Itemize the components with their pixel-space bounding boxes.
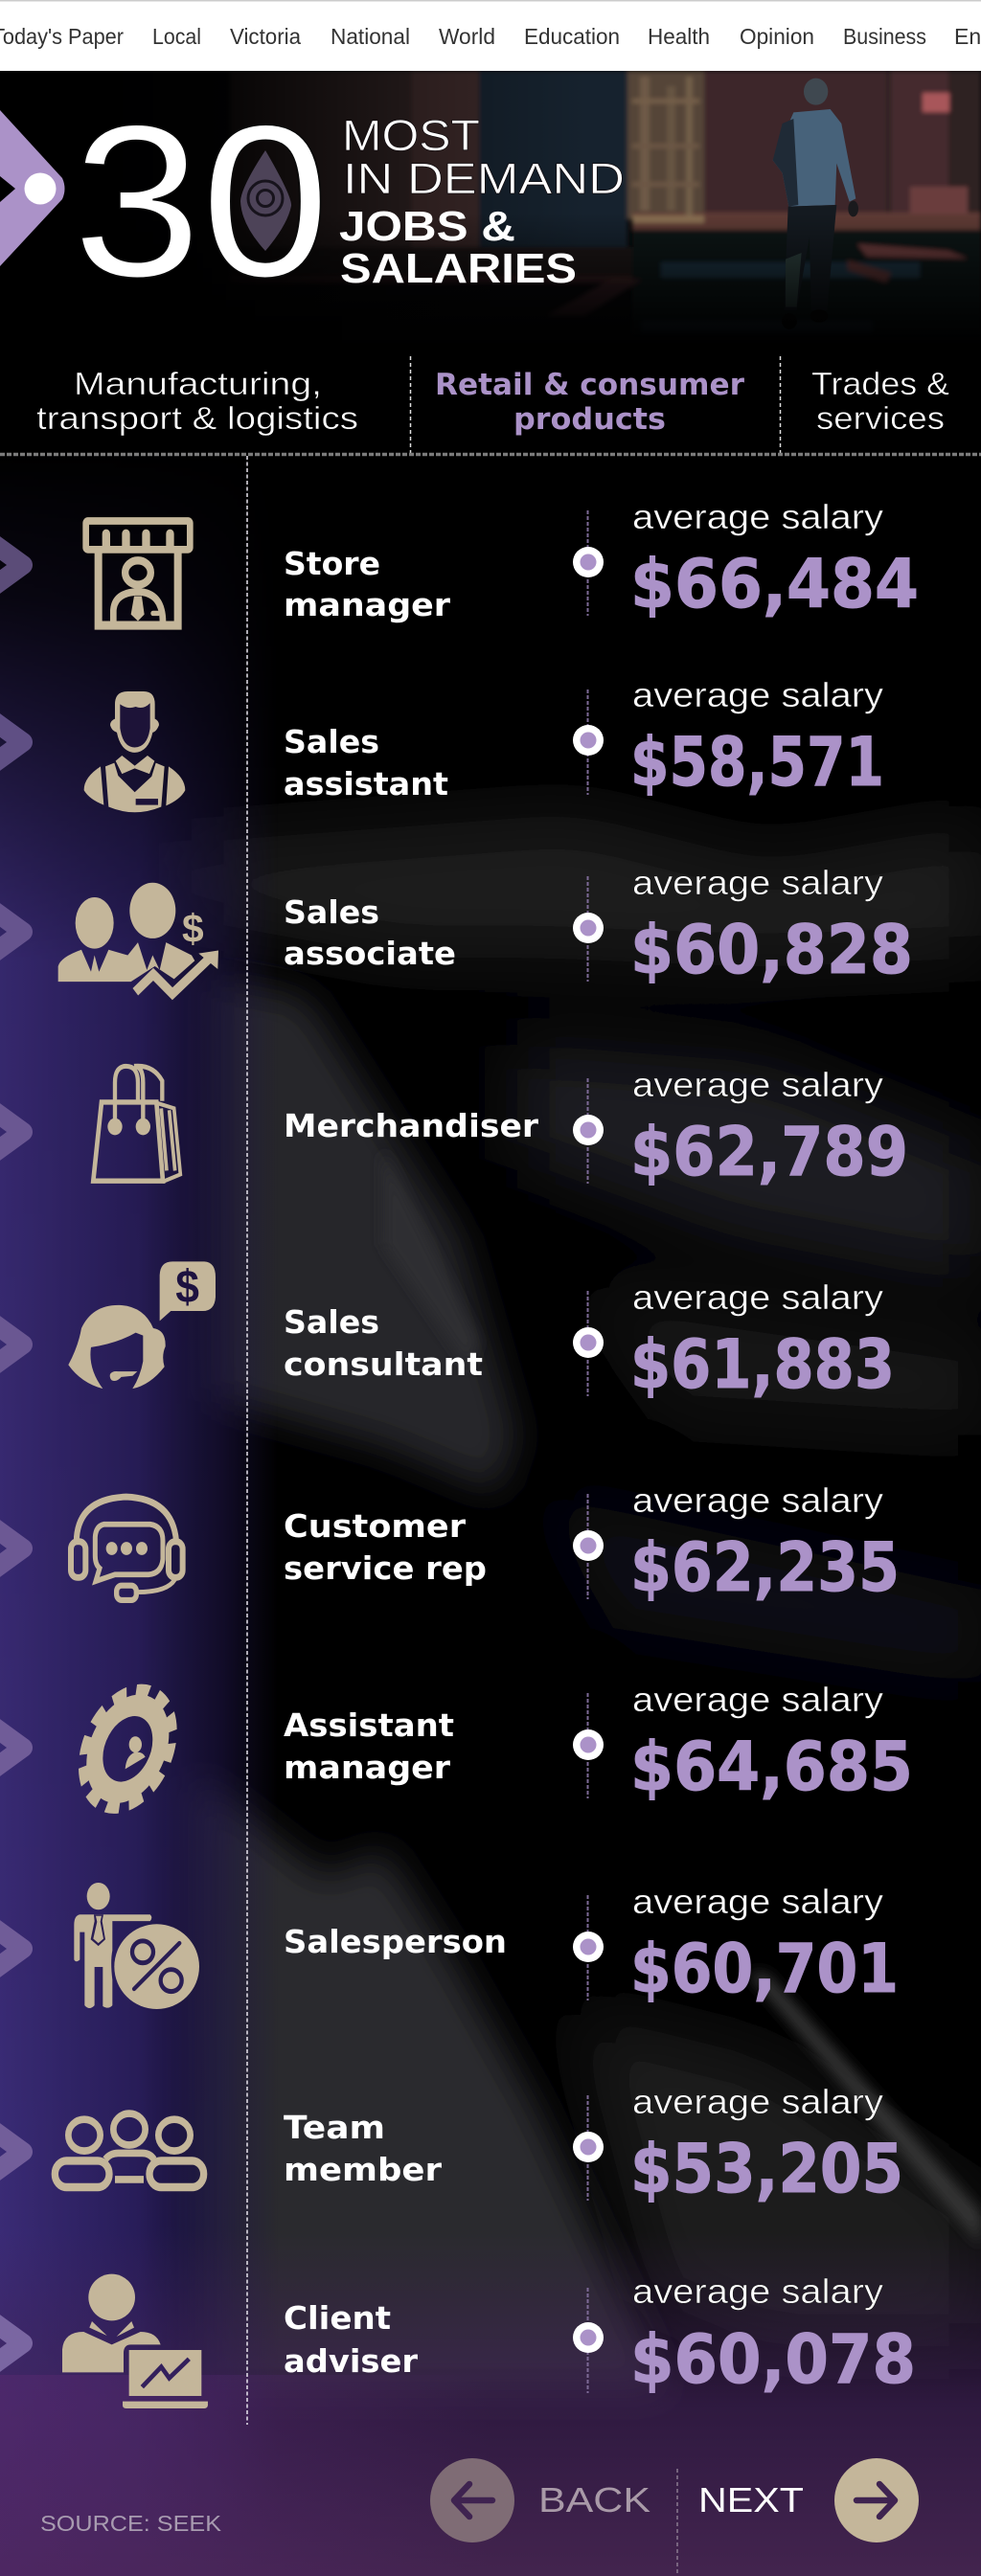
salary: $62,235 — [630, 1528, 900, 1607]
job title: assistant — [284, 765, 448, 802]
salary: $66,484 — [630, 545, 919, 623]
marker — [573, 1895, 604, 2000]
icon: next arrow — [834, 2458, 919, 2542]
salary: $60,078 — [630, 2320, 916, 2399]
job title: associate — [284, 935, 456, 972]
title text: MOST — [342, 111, 480, 160]
title text: JOBS & — [339, 203, 515, 250]
marker — [573, 510, 604, 616]
title text — [339, 111, 625, 292]
job title — [284, 1303, 483, 1383]
row: Store manager — [0, 497, 919, 625]
tab: manufacturing — [36, 366, 358, 436]
tab: retail active: products — [513, 402, 666, 437]
salary — [630, 1065, 908, 1191]
next button — [698, 2458, 919, 2542]
navigation bar: Opinion — [740, 24, 814, 49]
job title: Sales — [284, 723, 379, 760]
row: Merchandiser — [0, 1065, 908, 1191]
job title: Merchandiser — [284, 1107, 539, 1144]
salary: average salary — [632, 1480, 883, 1520]
category tabs — [0, 356, 981, 454]
icon: salesperson with percent — [74, 1883, 199, 2009]
marker — [573, 689, 604, 795]
job title: Salesperson — [284, 1923, 507, 1960]
icon: merchandiser bag — [93, 1066, 180, 1182]
chevron — [0, 1518, 23, 1579]
salary — [630, 1680, 913, 1806]
marker — [573, 1693, 604, 1798]
job title — [284, 723, 448, 802]
source note: SOURCE: SEEK — [40, 2511, 222, 2536]
salary: $53,205 — [630, 2130, 903, 2208]
marker — [573, 2095, 604, 2201]
header photo: man walking in a dark hall — [234, 71, 981, 314]
marker — [573, 1494, 604, 1599]
chevron — [0, 2121, 23, 2182]
tab: retail active — [435, 368, 745, 437]
salary: average salary — [632, 1277, 883, 1317]
row: Sales associate — [0, 863, 913, 994]
row: Assistant manager — [0, 1671, 913, 1826]
icon: store manager — [86, 521, 190, 625]
row: Salesperson — [0, 1882, 899, 2009]
marker — [573, 1078, 604, 1184]
icon: sales assistant — [84, 691, 185, 812]
job title — [284, 2299, 419, 2380]
icon: sales consultant: $ — [175, 1261, 199, 1313]
salary: average salary — [632, 497, 883, 536]
title text: IN DEMAND — [343, 154, 625, 203]
job title — [284, 893, 456, 972]
tab: manufacturing: transport & logistics — [36, 400, 358, 436]
big number 30: 30 — [73, 79, 330, 322]
chevron — [0, 1918, 23, 1979]
icon: sales associate — [58, 883, 218, 994]
tab: trades: services — [816, 400, 945, 436]
row: Customer service rep — [0, 1480, 900, 1607]
tab: trades — [811, 366, 949, 436]
navigation bar: World — [439, 24, 495, 49]
marker — [573, 1291, 604, 1396]
icon: team member chain — [55, 2113, 204, 2187]
salary: $60,701 — [630, 1930, 899, 2008]
tab: trades: Trades & — [811, 366, 949, 401]
job title: Client — [284, 2299, 391, 2337]
salary — [630, 2082, 903, 2208]
icon: tag hole — [25, 172, 56, 205]
salary — [630, 1480, 900, 1607]
navigation bar: Victoria — [230, 24, 301, 49]
row: Team member — [0, 2082, 903, 2208]
job title — [284, 1507, 487, 1587]
salary — [630, 1277, 895, 1404]
job title: Assistant — [284, 1706, 454, 1744]
job title: Sales — [284, 1303, 379, 1341]
navigation bar: Business — [843, 24, 926, 49]
salary — [630, 1882, 899, 2008]
job title: adviser — [284, 2342, 419, 2380]
next label: NEXT — [698, 2480, 804, 2520]
salary: $58,571 — [630, 723, 884, 802]
job title: manager — [284, 586, 451, 623]
job title: Sales — [284, 893, 379, 931]
job title: service rep — [284, 1549, 487, 1587]
chevron — [0, 1717, 23, 1778]
navigation bar: Local — [152, 24, 201, 49]
job title: manager — [284, 1749, 451, 1786]
icon: client adviser — [62, 2274, 208, 2408]
icon: purple tag chevron — [0, 110, 65, 266]
salary: $60,828 — [630, 911, 913, 989]
icon: sales consultant — [68, 1261, 216, 1389]
navigation bar: National — [331, 24, 410, 49]
title text: SALARIES — [340, 245, 577, 292]
marker — [573, 876, 604, 982]
icon: eye inside zero — [240, 150, 291, 251]
salary: $64,685 — [630, 1728, 913, 1806]
salary: average salary — [632, 1680, 883, 1719]
salary: $62,789 — [630, 1113, 908, 1191]
back label: BACK — [538, 2480, 650, 2520]
left purple column — [0, 522, 267, 2491]
bottom purple glow — [0, 2231, 981, 2576]
tab: retail active: Retail & consumer — [435, 368, 745, 402]
job title — [284, 545, 451, 623]
job title — [284, 2109, 443, 2188]
job title: Customer — [284, 1507, 467, 1545]
salary — [630, 675, 884, 802]
salary: average salary — [632, 2271, 883, 2311]
chevron — [0, 2313, 23, 2374]
icon: sales associate: $ — [182, 907, 204, 952]
icon: back arrow — [430, 2458, 514, 2542]
salary: $61,883 — [630, 1325, 895, 1404]
job title: consultant — [284, 1345, 483, 1383]
chevron — [0, 712, 23, 773]
row: Sales assistant — [0, 675, 884, 812]
salary — [630, 497, 919, 623]
navigation bar — [0, 0, 981, 71]
job title — [284, 1706, 454, 1786]
chevron — [0, 534, 23, 596]
job title: Team — [284, 2109, 385, 2146]
icon: assistant manager gear — [65, 1671, 191, 1826]
row: Client adviser — [0, 2271, 916, 2408]
salary — [630, 863, 913, 989]
row: Sales consultant — [0, 1261, 895, 1404]
salary — [630, 2271, 916, 2399]
icon: customer service headset — [71, 1497, 183, 1600]
salary: average salary — [632, 2082, 883, 2121]
navigation bar: Education — [524, 24, 620, 49]
navigation bar: Health — [648, 24, 710, 49]
salary: average salary — [632, 863, 883, 902]
tab: manufacturing: Manufacturing, — [74, 366, 322, 401]
job title: member — [284, 2151, 443, 2188]
chevron — [0, 1314, 23, 1375]
chevron — [0, 901, 23, 962]
job title: Store — [284, 545, 380, 582]
marker — [573, 2288, 604, 2393]
chevron — [0, 1101, 23, 1163]
salary: average salary — [632, 1882, 883, 1921]
salary: average salary — [632, 1065, 883, 1104]
title group — [0, 79, 625, 322]
salary: average salary — [632, 675, 883, 714]
back button — [430, 2458, 650, 2542]
